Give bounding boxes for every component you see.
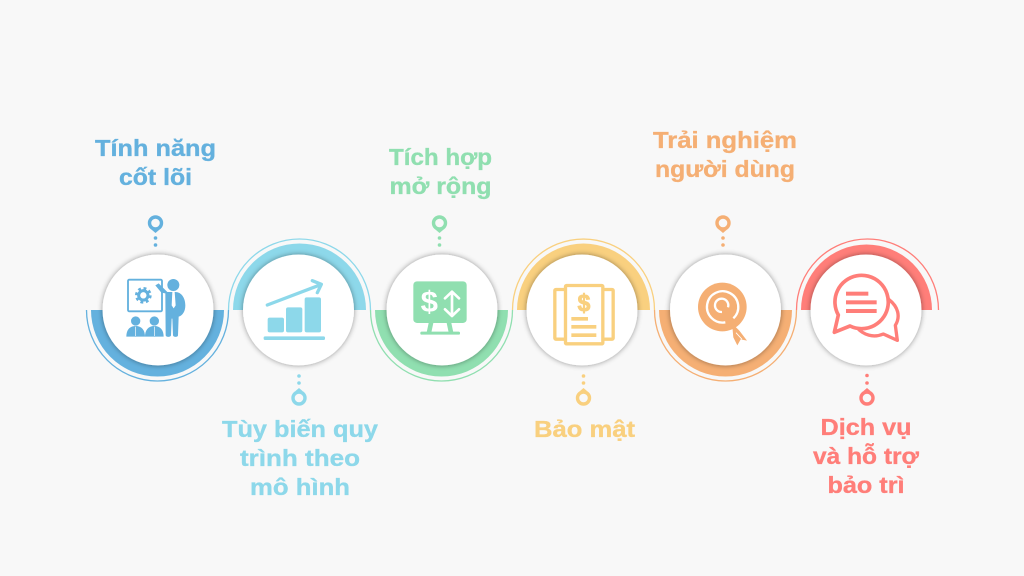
icon: monitor with dollar and arrows <box>413 281 467 335</box>
heading: step 1: Tính năng <box>95 135 216 161</box>
pin marker: step 4 <box>578 374 590 404</box>
heading: step 3 <box>389 144 492 199</box>
white circle: step 1 <box>102 254 214 366</box>
half ring band: step 1 <box>86 310 228 381</box>
pin marker: step 3 <box>434 217 446 247</box>
heading: step 2: mô hình <box>250 474 350 500</box>
panel: step 5 user experience <box>653 127 797 381</box>
icon: target with dart <box>698 283 747 345</box>
white circle: step 6 <box>810 254 922 366</box>
white circle: step 5 <box>670 254 781 366</box>
heading: step 2: Tùy biến quy <box>222 416 378 442</box>
heading: step 1 <box>95 135 216 190</box>
half ring band: step 3 <box>370 310 512 381</box>
icon: presenter with audience <box>126 279 185 337</box>
heading: step 6: Dịch vụ <box>820 414 912 440</box>
pin marker: step 1 <box>150 217 162 247</box>
panel: step 2 workflow customization <box>222 239 378 500</box>
white circle: step 3 <box>386 254 498 366</box>
icon: rising bar chart <box>264 281 325 340</box>
pin marker: step 5 <box>717 217 729 247</box>
heading: step 4: Bảo mật <box>534 416 635 442</box>
heading: step 3: mở rộng <box>390 173 492 199</box>
heading: step 6 <box>813 414 920 498</box>
pin marker: step 6 <box>861 374 873 404</box>
heading: step 2 <box>222 416 378 500</box>
panel: step 4 security <box>512 239 654 442</box>
heading: step 5: người dùng <box>655 156 795 182</box>
panel: step 1 core features <box>86 135 228 381</box>
heading: step 3: Tích hợp <box>389 144 492 170</box>
white circle: step 2 <box>243 254 354 366</box>
heading: step 6: và hỗ trợ <box>813 442 920 469</box>
half ring band: step 5 <box>654 310 796 381</box>
panel: step 6 service and maintenance <box>796 239 938 498</box>
half ring band: step 6 <box>796 239 938 310</box>
pin marker: step 2 <box>293 374 305 404</box>
heading: step 1: cốt lõi <box>119 164 192 190</box>
heading: step 2: trình theo <box>240 445 360 471</box>
white circle: step 4 <box>526 254 638 366</box>
icon: financial document: $ <box>578 290 590 317</box>
icon: monitor with dollar and arrows: $ <box>421 286 438 319</box>
heading: step 6: bảo trì <box>828 472 904 498</box>
icon: financial document <box>555 285 613 344</box>
heading: step 5 <box>653 127 797 182</box>
heading: step 5: Trải nghiệm <box>653 127 797 153</box>
half ring band: step 4 <box>512 239 654 310</box>
half ring band: step 2 <box>228 239 370 310</box>
panel: step 3 extended integration <box>370 144 512 381</box>
icon: chat bubbles <box>834 275 898 340</box>
